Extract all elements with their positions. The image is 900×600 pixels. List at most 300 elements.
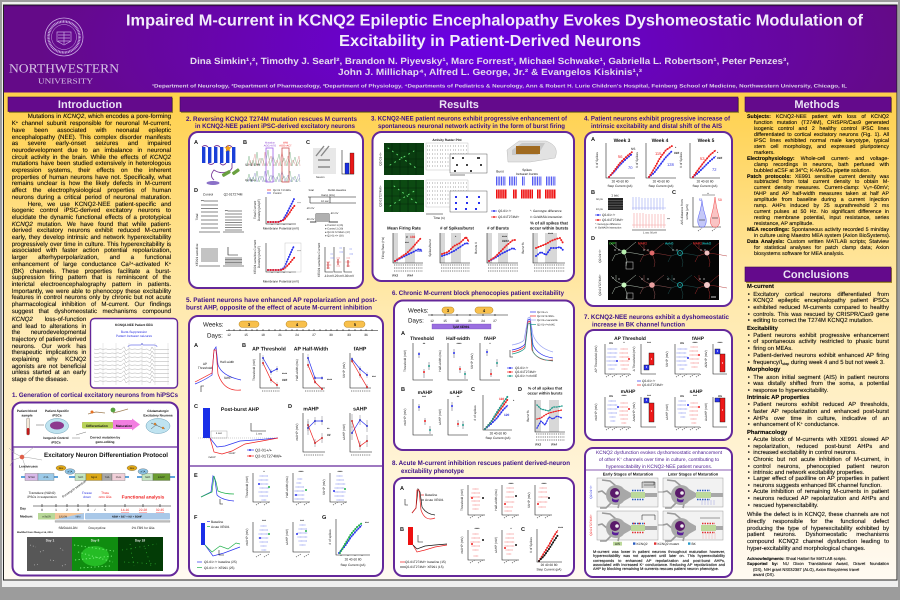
- lentivirus vectors: Ngn2: [91, 476, 98, 479]
- text block: model heading: hyperexcitability in KCNQ2-NEE patient neurons.: [606, 465, 712, 470]
- C: post-burst AHP trace: C: [194, 404, 198, 410]
- timeline with treatment bar: 21: [468, 319, 472, 323]
- protocol timeline: [20, 479, 171, 512]
- text block: introduction: affect the electrophysiological properties of human: [12, 187, 171, 194]
- chart: mean firing rate: 103: [417, 249, 423, 253]
- F: XE991 post-burst trace and swarms: F: [194, 515, 198, 521]
- A: weekly firing curves: Step Current (pA): [693, 184, 717, 188]
- chart: mean firing rate: Firing Rate (Hz): [381, 237, 385, 259]
- D: mAHP and sAHP plots: sAHP: [353, 406, 367, 412]
- A: weekly firing curves: 20 40 60 80: [697, 180, 714, 184]
- text block: conclusions: patient neurons. Dyshomeostatic mechanisms: [747, 532, 889, 538]
- B: post-burst trace: Q2-01T274M/+ XE991 (15): [405, 565, 444, 569]
- mAHP swarm and box: mAHP: [621, 389, 636, 395]
- B: firing protocol and traces: [591, 190, 670, 234]
- A: channel topology: [194, 140, 240, 185]
- C: spike count: C: [471, 387, 475, 393]
- text block: acknowledgments: Supported by: NU Dixon Translational Award, Dravet foundation: [747, 561, 889, 566]
- genotype legend: Q2-01T274M/+: [498, 215, 520, 219]
- text block: methods: Patch protocols: XE991 sensitive current density was: [747, 174, 889, 180]
- protocol timeline: 1: [55, 508, 57, 512]
- fAHP swarm and box: ****: [693, 341, 698, 345]
- micrographs: Day 1: [46, 538, 54, 542]
- text block: conclusions: control neurons, phenocopied patient neuron: [753, 464, 889, 470]
- B: mAHP and sAHP: mAHP: [418, 390, 433, 396]
- MEA green images: Q2-01T274M/+: [378, 185, 382, 207]
- B: firing protocol and traces: ***: [667, 218, 670, 221]
- current density dot plots: XE991 sensitive Current: [317, 243, 321, 277]
- text block: conclusions: exhibited reduced M-currents compared to healthy: [753, 305, 889, 311]
- panel 3 title: 3. KCNQ2-NEE patient neurons exhibit progressive enhancement of: [371, 116, 568, 123]
- text block: conclusions: The axon initial segment (AIS) in patient neurons: [753, 375, 889, 381]
- D: mAHP and sAHP plots: sAHP (mV): [342, 424, 346, 440]
- panel 4: intrinsic excitability: [585, 132, 732, 306]
- B: swarm plots: ****: [475, 527, 480, 531]
- sAHP swarm and box: ns: [680, 394, 684, 398]
- B: sequencing chromatograms: AGG>ACT: [279, 144, 292, 148]
- B: post-burst trace: B: [400, 527, 404, 533]
- B: mAHP and sAHP: mAHP (mV): [403, 409, 407, 425]
- title: Excitability in Patient-Derived Neurons: [339, 33, 641, 50]
- B: firing protocol and traces: *: Genotype difference: [595, 223, 621, 226]
- protocol timeline: 22-28: [139, 508, 147, 512]
- A: weekly firing curves: Step Current (pA): [649, 184, 673, 188]
- A: weekly firing curves: A: [591, 137, 595, 143]
- text block: conclusions: Larger effect of paxilline on AP properties in patient: [753, 476, 889, 482]
- text block: methods: current density measures. Current-clamp: Vh=-60mV;: [754, 185, 889, 191]
- arrow to iPSC dish: [36, 424, 44, 426]
- A: weekly firing curves: *: [717, 151, 719, 155]
- text block: conclusions: Patient neurons exhibit progressive enhancement: [753, 333, 889, 339]
- differentiation arrow: [82, 408, 140, 430]
- summary panel: dyshomeostatic model: Q2-01T274M/+: [589, 514, 593, 536]
- C: AIS distance violins: 51: [699, 198, 703, 202]
- D: neuron immunostaining: MAP2/AnkG: [693, 242, 712, 246]
- F: XE991 post-burst trace and swarms: Acute XE991: [211, 525, 230, 529]
- text block: introduction continued beside EEG: KCNQ2 loss-of-function: [12, 316, 86, 323]
- fAHP swarm and box: ΔfAHP (mV): [704, 350, 708, 368]
- protocol timeline: down: [83, 495, 91, 499]
- text block: introduction continued beside EEG: explaining why KCNQ2: [12, 356, 86, 363]
- protocol timeline: 2: [66, 508, 68, 512]
- panel 5 title: 5. Patient neurons have enhanced AP repolarization and post-: [186, 297, 377, 304]
- timeline with treatment bar: 7µM XE991: [453, 325, 470, 329]
- lentivirus vectors: T2A: [105, 476, 110, 479]
- D: percent spikes in bursts: occur within bursts: [527, 392, 563, 396]
- G: spike count plot: Step Current (pA): [341, 563, 365, 567]
- C: spike count: Step Current (pA): [537, 568, 561, 572]
- D: current density curves: [253, 189, 301, 284]
- AP threshold swarm and box: ***: [647, 341, 652, 345]
- text block: introduction: larger afterhyperpolarization, and a functional: [12, 254, 171, 261]
- A: weekly firing curves: [591, 137, 723, 188]
- panel 7: BK channel function: [585, 330, 732, 440]
- protocol timeline: 14-16: [121, 508, 129, 512]
- iPSC dish: Isogenic Control: [43, 436, 69, 440]
- B: AP threshold, half-width, fAHP plots: Half-width (ms): [295, 359, 299, 381]
- D: neuron immunostaining: D: [591, 236, 595, 242]
- genotype legend: [491, 209, 563, 219]
- text block: introduction: have been associated with neonatal epileptic: [12, 127, 171, 134]
- D: voltage clamp traces: XE991 sensitive: [195, 243, 199, 266]
- patient blood sample: [17, 409, 37, 435]
- mAHP swarm and box: mAHP (mV): [594, 404, 598, 420]
- text block: introduction continued beside EEG: agonists are not beneficial: [12, 363, 86, 370]
- text block: model caption: [593, 550, 726, 571]
- D: mAHP and sAHP plots: **: [327, 427, 330, 431]
- figure: patient EEG: Pattern between seizures: [116, 334, 152, 338]
- weeks and days timeline: 15: [244, 333, 248, 337]
- medium bars: mTeSR: [42, 515, 51, 518]
- panel 5 title: [186, 297, 377, 312]
- AP traces and legends: Q2-01+/+acuteXE: [537, 319, 558, 322]
- panel 2 title: [186, 116, 357, 130]
- B: AP threshold, half-width, fAHP plots: [242, 343, 376, 391]
- protocol timeline: Puromycin selection: [61, 479, 87, 499]
- text block: conclusions: Intrinsic AP properties: [747, 395, 809, 401]
- D: current density curves: Density (pA/pF): [257, 246, 261, 268]
- AP traces and legends: Q2-01+/+chrXE: [515, 374, 537, 378]
- E: XE991 AP trace and swarms: ****: [338, 470, 343, 474]
- logo: Northwestern University seal: UNIVERSITY: [38, 76, 94, 86]
- activity raster plots: Activity Raster Plot: [432, 138, 463, 142]
- text block: conclusions: rescued hyperexcitability.: [753, 503, 818, 509]
- panel 2 title: 2. Reversing KCNQ2 T274M mutation rescues M currents: [186, 116, 357, 123]
- medium bars: SB/DAA/LDN: [59, 526, 78, 530]
- chart: number of bursts: # of Bursts: [487, 226, 510, 230]
- B: AP threshold, half-width, fAHP plots: Threshold (mV): [252, 359, 256, 381]
- panel 5: AP repolarization: [189, 316, 383, 576]
- protocol diagram: -40 mV: [330, 212, 339, 215]
- B: sequencing chromatograms: B: [243, 140, 247, 146]
- A: weekly firing curves: 128: [667, 162, 674, 167]
- panel 3 title: [371, 116, 568, 130]
- chart: percent spikes in bursts: % of all spikes that: [530, 220, 568, 226]
- text block: methods: [747, 114, 890, 257]
- E: XE991 AP trace and swarms: [194, 470, 347, 505]
- text block: model caption: hyperexcitability was not apparent until later on. This hyperexcitability: [593, 554, 725, 558]
- C: spike count: 20 40 60 80: [541, 563, 558, 567]
- C: AIS distance violins: *: [707, 192, 709, 196]
- text block: methods: in culture using Maestro MEA system (Axion BioSystems).: [754, 233, 890, 239]
- D: neuron immunostaining: AnkG: [665, 242, 674, 246]
- medium bars: [17, 513, 170, 534]
- text block: model heading: [596, 450, 722, 470]
- D: current density curves: Q2-01 T274M/+: [273, 189, 292, 192]
- protocol timeline: Functional analysis: [122, 494, 165, 500]
- C: western blot and bars: Neuron: [316, 176, 325, 179]
- text block: methods: clamp recordings in neurons, bath perfused with: [754, 162, 889, 168]
- A: swarm plots: ****: [542, 482, 547, 486]
- mAHP swarm and box: ***: [647, 394, 652, 398]
- G: spike count plot: [322, 515, 370, 567]
- legend: AIS, KCNQ2, mutant, BK: BK: [692, 542, 697, 546]
- A: threshold, half-width, fAHP: [401, 331, 500, 380]
- text block: conclusions: Excitatory cortical neurons differentiated from: [753, 292, 889, 298]
- timeline with treatment bar: 27: [493, 319, 497, 323]
- chart: mean firing rate: 102: [410, 235, 416, 239]
- G: spike count plot: # of spikes: [328, 529, 332, 545]
- A: threshold, half-width, fAHP: Half-width: [446, 336, 470, 342]
- timeline with treatment bar: 24: [481, 319, 485, 323]
- panel 7 title: increase in BK channel function: [592, 322, 685, 329]
- C: AIS distance violins: C: [672, 190, 676, 196]
- heading: Methods: [745, 97, 892, 113]
- text block: conclusions: was distally shifted from the soma, a potential: [753, 381, 889, 387]
- A: threshold, half-width, fAHP: fAHP: [484, 336, 497, 342]
- C: post-burst AHP trace: mAHP: [208, 456, 216, 459]
- chart: mean firing rate: Mean Firing Rate: [387, 226, 422, 230]
- timeline with treatment bar: 4: [483, 308, 486, 313]
- protocol diagram: -80 mV: [306, 218, 315, 221]
- medium bars: Medium:: [20, 514, 33, 518]
- D: voltage clamp traces: Control: [203, 192, 213, 196]
- text block: introduction: Importantly, we were able to phenocopy these excitability: [12, 288, 171, 295]
- protocol diagram: -20 mV: [306, 207, 315, 210]
- timeline with treatment bar: Weeks:: [408, 308, 429, 314]
- panel 2 title: in KCNQ2-NEE patient iPSC-derived excitatory neurons: [195, 123, 355, 130]
- summary panel: dyshomeostatic model: Early Stages of Maturation: [603, 472, 654, 477]
- protocol timeline: 3: [77, 508, 79, 512]
- burst rasters: Burst: [496, 170, 504, 174]
- D: mAHP and sAHP plots: mAHP (mV): [295, 424, 299, 440]
- panel 7 title: [584, 314, 729, 329]
- A: swarm plots: [460, 482, 552, 518]
- A: AP trace: Half-width: [220, 360, 234, 364]
- patient blood sample: Patient blood: [17, 409, 37, 413]
- weeks and days timeline: Weeks:: [203, 322, 224, 329]
- C: post-burst AHP trace: Q2-01T274M/+: [255, 454, 283, 458]
- header band: [4, 5, 896, 92]
- C: spike count: 20 40 60 80: [490, 432, 507, 436]
- A: threshold, half-width, fAHP: ****: [457, 342, 462, 346]
- lentivirus vectors: hPGK: [28, 476, 35, 479]
- MEA device: [507, 141, 556, 162]
- text block: methods: markers.: [754, 150, 775, 156]
- iPSC dish: iPSCs: [52, 414, 62, 418]
- text block: methods: iPSC lines exhibited normal male karyotype, typical: [754, 138, 889, 144]
- A: weekly firing curves: Week 4: [652, 138, 669, 144]
- activity raster plots: Time (s): [433, 216, 445, 220]
- text block: introduction: Mutations in KCNQ2, which encodes a pore-forming: [28, 113, 171, 120]
- text block: acknowledgments: (DS), NIH grant NS032387 (ALG), Axion Biosystems travel: [753, 567, 859, 572]
- chart: spikes per burst: Spikes/burst: [428, 239, 432, 257]
- text block: conclusions: AHPs over time in culture, indicative of an: [753, 416, 889, 422]
- A: threshold, half-width, fAHP: Threshold: [410, 336, 434, 342]
- text block: introduction: KCNQ2 mutation. We have found that while patient-: [12, 221, 171, 228]
- sAHP swarm and box: sAHP (mV): [665, 404, 669, 420]
- E: XE991 AP trace and swarms: fAHP (mV): [322, 479, 326, 495]
- mAHP swarm and box: ΔmAHP (mV): [632, 402, 636, 422]
- chart: spikes per burst: [428, 226, 474, 271]
- B: mAHP and sAHP: sAHP: [449, 390, 463, 396]
- heading: Conclusions: Conclusions: [783, 269, 849, 281]
- text block: introduction: enhancement of large conductance Ca2+-activated K+: [12, 260, 171, 268]
- text block: conclusions: neurons suggests enhanced BK channel function.: [753, 483, 882, 489]
- C: AIS distance violins: soma (µm): [685, 204, 689, 220]
- text block: conclusions: repolarization, reduced post-burst AHPs and: [753, 444, 889, 450]
- text block: conclusions: Chronic but not acute inhibition of M-current, in: [753, 457, 889, 463]
- protocol diagram: [306, 189, 356, 222]
- summary panel: dyshomeostatic model: Later Stages of Maturation: [668, 472, 719, 477]
- C: post-burst AHP trace: 1 sec: [216, 432, 223, 435]
- D: mAHP and sAHP plots: ##: [327, 433, 331, 437]
- weeks and days timeline: 27: [312, 333, 316, 337]
- genotype legend: Q2-01+/+: [498, 209, 512, 213]
- text block: introduction: progressively over time in culture. This hyperexcitability is: [12, 241, 171, 248]
- lentivirus vectors: EGFP: [158, 476, 165, 479]
- fAHP swarm and box: fAHP: [692, 336, 705, 342]
- text block: methods: stem cell morphology, and expressed pluripotency: [754, 144, 889, 150]
- text block: introduction: circuit activity in the brain. While the effects of KCNQ2: [12, 154, 171, 161]
- lentivirus vectors: rtTA: [44, 476, 49, 479]
- panel 8: acute inhibition rescue: [394, 478, 574, 576]
- C: spike count: # of Spikes: [529, 537, 533, 553]
- B: swarm plots: mAHP (mV): [460, 537, 464, 553]
- heading: Conclusions: [745, 267, 892, 283]
- text block: conclusions: increased excitability in control neurons.: [753, 450, 857, 456]
- neuron dish: Glutamatergic: [147, 409, 169, 413]
- C: spike count: 110: [499, 397, 504, 401]
- legend: Q2-01+/+: [642, 379, 656, 383]
- text block: conclusions: Pharmacology: [747, 430, 787, 436]
- G: spike count plot: G: [322, 515, 326, 521]
- affiliations: ¹Department of Neurology, ²Department of Pharmacology, ³Department of Physiology, ⁴Departments of Pediatrics & Neurology, Ann & Robert H. Lurie Children's Hospital, Feinberg School of Medicine, Northwestern University, Chicago, IL: [152, 83, 847, 89]
- AP threshold swarm and box: [594, 336, 656, 377]
- sAHP swarm and box: ns: [718, 394, 722, 398]
- panel 3 title: spontaneous neuronal network activity in the form of burst firing: [378, 123, 565, 130]
- B: sequencing chromatograms: [243, 140, 300, 182]
- MEA green images: [378, 143, 424, 212]
- weeks and days timeline: 5: [354, 322, 357, 327]
- lentivirus vectors: TetO: [145, 476, 150, 479]
- D: current density curves: Density (pA/pF): [257, 199, 261, 221]
- sAHP swarm and box: ΔsAHP (mV): [704, 403, 708, 421]
- weeks and days timeline: 21: [278, 333, 282, 337]
- protocol title: Excitatory Neuron Differentiation Protocol: [44, 452, 168, 459]
- text block: methods: isogenic control and 2 healthy control iPSC lines: [754, 126, 889, 132]
- text block: conclusions: firing on MEAs.: [753, 346, 793, 352]
- text block: introduction: K+ channel subunit responsible for neuronal M-current,: [12, 120, 171, 127]
- A: AP trace: fAHP: [224, 376, 231, 380]
- protocol diagram: 10 sec: [321, 200, 330, 203]
- D: current density curves: Total Current: [253, 201, 257, 219]
- B: AP threshold, half-width, fAHP plots: ***: [372, 375, 376, 379]
- text block: conclusions: [747, 284, 890, 552]
- C: AIS distance violins: 50: [718, 198, 722, 202]
- text block: conclusions: Patient neurons exhibit reduced AP thresholds,: [753, 402, 889, 408]
- AP threshold swarm and box: *: [623, 341, 625, 345]
- A: swarm plots: Half-width (ms): [494, 489, 498, 511]
- B: sequencing chromatograms: Mutation: [265, 142, 276, 144]
- text block: methods: resistance, AP amplitude.: [754, 221, 814, 227]
- weeks and days timeline: 30: [329, 333, 333, 337]
- current density dot plots: ● Control 2 (30): [325, 228, 343, 230]
- text block: introduction: suggest that dyshomeostatic mechanisms compound: [12, 308, 171, 315]
- text block: introduction: features in control neurons only by chronic but not acute: [12, 294, 171, 301]
- text block: conclusions: compound KCNQ2 channel dysfunction leading to: [747, 539, 889, 545]
- current density dot plots: -20 mV: [334, 274, 345, 278]
- medium bars: 2% FBS for Glia: [132, 526, 155, 530]
- neuron dish: [143, 409, 173, 434]
- chart: percent spikes in bursts: occur within bursts: [530, 226, 569, 230]
- chart: spikes per burst: *: [455, 235, 457, 239]
- heading: Introduction: Introduction: [58, 99, 122, 111]
- B: mAHP and sAHP: **: [457, 395, 460, 399]
- fAHP swarm and box: fAHP (mV): [665, 351, 669, 367]
- figure: patient EEG: [90, 318, 178, 388]
- A: weekly firing curves: 20 40 60 80: [612, 180, 629, 184]
- text block: conclusions: producing the type of hyperexcitability exhibited by: [747, 526, 889, 532]
- text block: methods: Electrophysiology: Whole-cell current- and voltage-: [747, 156, 889, 162]
- text block: acknowledgments: award (DS).: [753, 572, 775, 577]
- current density dot plots: ● Q2-01+/+ (30): [325, 234, 344, 238]
- D: percent spikes in bursts: Wk3: [535, 442, 541, 446]
- legend: Q2-01T274M/+: [642, 383, 664, 387]
- micrographs: Day 18: [135, 538, 145, 542]
- panel 4 title: intrinsic excitability and distal shift of the AIS: [591, 123, 723, 130]
- timeline with treatment bar: 15: [443, 319, 447, 323]
- AP traces and legends: Q2-01+/+chrXE: [537, 324, 555, 326]
- weeks and days timeline: 12: [227, 333, 231, 337]
- B: firing protocol and traces: Q2-01+/+: [602, 213, 616, 217]
- legend: AIS, KCNQ2, mutant, BK: KCNQ2: [636, 542, 648, 546]
- protocol timeline: Thaw: [101, 491, 110, 495]
- text block: introduction: suppression firing pattern that is reminiscent of the: [12, 274, 171, 281]
- B: firing protocol and traces: 60 pA: [596, 198, 603, 201]
- D: current density curves: Control: [273, 192, 282, 195]
- text block: introduction continued beside EEG: trajectory of patient-derived: [12, 336, 86, 343]
- differentiation arrow: Maturation: [116, 424, 132, 428]
- C: western blot and bars: C: [306, 140, 310, 146]
- C: spike count: [521, 526, 564, 572]
- mAHP swarm and box: ****: [622, 394, 627, 398]
- text block: methods: Subjects: KCNQ2-NEE patient with loss of KCNQ2: [747, 114, 889, 120]
- text block: conclusions: controls. This was rescued by CRISPR/Cas9 gene: [753, 312, 889, 318]
- A: weekly firing curves: 70: [628, 165, 633, 170]
- A: weekly firing curves: NS: [631, 147, 635, 151]
- authors: Dina Simkin¹,², Timothy J. Searl², Brandon N. Piyevsky¹, Marc Forrest³, Michael Schwake¹, Gabriella L. Robertson¹, Peter Penzes³,: [190, 56, 789, 66]
- lentivirus vectors: Puro: [116, 476, 122, 479]
- D: percent spikes in bursts: Wk4: [551, 442, 557, 446]
- B: swarm plots: sAHP (mV): [494, 537, 498, 553]
- AP traces and legends: Q2-01+/+: [537, 311, 548, 314]
- patient blood sample: sample: [22, 414, 33, 418]
- F: XE991 post-burst trace and swarms: mAHP (mV): [245, 529, 249, 545]
- D: current density curves: Membrane Potential (mV): [263, 226, 299, 230]
- B: firing protocol and traces: Q2-01T274M/+: [602, 218, 624, 222]
- text block: conclusions: faster AP repolarization and enhanced post-burst: [753, 409, 889, 415]
- text block: introduction: associated with faster action potential repolarization,: [12, 247, 171, 254]
- burst rasters: [496, 168, 556, 194]
- text block: conclusions: directly responsible for the functional defect: [747, 519, 889, 525]
- A: swarm plots: ****: [509, 482, 514, 486]
- A: AP traces: [400, 486, 444, 519]
- text block: conclusions: Patient-derived neurons exhibit enhanced AP firing: [753, 353, 889, 359]
- text block: introduction continued beside EEG: stage of the disease.: [12, 376, 68, 383]
- protocol diagram: Total: [308, 189, 314, 192]
- A: channel topology: A: [194, 140, 198, 146]
- differentiation arrow: Differentiation: [86, 424, 108, 428]
- protocol diagram: XE991 Baseline: [328, 189, 347, 192]
- sAHP swarm and box: sAHP: [689, 389, 703, 395]
- legend: AIS, KCNQ2, mutant, BK: [613, 542, 697, 546]
- text block: introduction: Here, we use KCNQ2-NEE patient-specific and: [28, 201, 171, 208]
- text block: methods: subtracted from total current density to obtain M-: [754, 179, 889, 185]
- AP threshold swarm and box: ns: [609, 341, 613, 345]
- legend: [637, 379, 664, 387]
- panel 7 title: 7. KCNQ2-NEE neurons exhibit a dyshomeostatic: [584, 314, 729, 321]
